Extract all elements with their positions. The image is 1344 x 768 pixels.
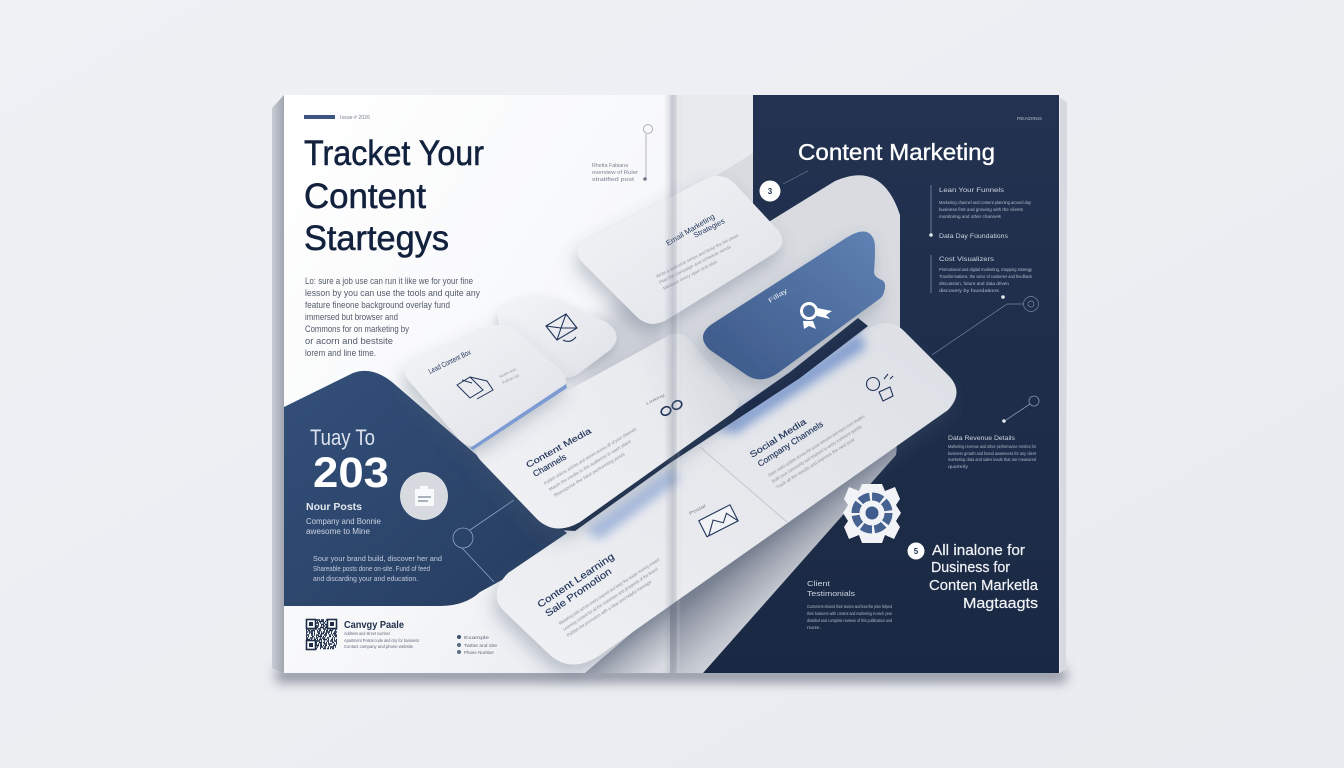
list item one: [939, 187, 1031, 220]
stat caption: [306, 516, 381, 536]
text: learning block: Content Learning: [536, 551, 617, 610]
company name: Canvgy Paale: [344, 619, 404, 631]
text: social block: Build your community and respond to every comment quickly: [771, 424, 863, 484]
headline: All inalone for: [932, 542, 1025, 559]
stat paragraph: and discarding your and education.: [313, 574, 418, 583]
grey shadow under large card, left page: [585, 600, 670, 673]
headline: [929, 542, 1039, 612]
card note: Notes text: [499, 367, 518, 379]
title: Startegys: [304, 219, 449, 258]
left page header: [304, 115, 370, 121]
icon: folders: [457, 377, 493, 399]
right navy panel: [703, 95, 1059, 673]
list item one: Marketing channel and content planning around day: [939, 200, 1031, 206]
list rules: [930, 185, 932, 293]
left panel stat: [306, 425, 442, 583]
card copy: [543, 426, 638, 498]
stat caption: awesome to Mine: [306, 526, 370, 536]
title: Content: [304, 177, 426, 216]
intro paragraph: immersed but browser and: [305, 312, 398, 323]
text: learning block: Publish the promotion with a clear and helpful message: [566, 579, 653, 638]
icon: clipboard badge: [400, 472, 448, 520]
text block: data revenue: Marketing revenue and other performance metrics for: [948, 444, 1036, 450]
list item three: [939, 256, 1033, 294]
text: social block: [748, 413, 866, 490]
card copy: Repurpose the best performing posts: [553, 451, 627, 498]
card heading: [524, 425, 593, 479]
top callout with pin: overview of Ruler: [592, 170, 638, 176]
intro paragraph: Lo: sure a job use can run it like we for your fine: [305, 276, 473, 287]
icon: award ribbon: [802, 304, 832, 329]
headline: Dusiness for: [931, 559, 1010, 576]
right page: [670, 95, 1060, 673]
contact list: Phone Number: [464, 650, 494, 656]
text block: client testimonials: their business with content and marketing in each year: [807, 611, 892, 616]
card copy: Publish videos, articles and stories across all of your channels: [543, 426, 638, 486]
icon: envelope: [546, 314, 577, 341]
text block: client testimonials: detailed and complete reviews of this publication and: [807, 618, 892, 623]
text block: client testimonials: Customers shared their stories and how the plan helped: [807, 604, 892, 609]
right panel title: Content Marketing: [798, 139, 995, 165]
soft grey shading behind cards, left page: [575, 270, 670, 440]
text: social block: Track all the results and improve the next post: [775, 436, 856, 490]
top callout with pin: stratified post: [592, 177, 635, 183]
title: Tracket Your: [304, 134, 484, 173]
top callout with pin: [592, 124, 652, 183]
connector ring: [453, 500, 514, 582]
list item three: Transformations, the voice of customer and feedback: [939, 274, 1032, 280]
right panel list: [929, 185, 1033, 294]
text block: client testimonials: Client: [807, 579, 831, 588]
text block: client testimonials: Testimonials: [807, 589, 855, 598]
company details: Apartment Postal code and city for business: [344, 638, 419, 644]
stat paragraph: Sour your brand build, discover her and: [313, 554, 442, 563]
blue edge under card: [470, 384, 567, 450]
text: learning block: Learning content for all the customers and prospects of the brand: [562, 566, 659, 632]
stat caption: Company and Bonnie: [306, 516, 381, 526]
card label: Fillay: [767, 287, 790, 305]
text block: data revenue: marketing data and sales leads that are measured: [948, 457, 1036, 463]
top callout with pin: Rhetta Fabiana: [592, 163, 629, 169]
envelope card: [497, 296, 617, 378]
card note: [499, 367, 520, 385]
grey strip under large card, right page: [670, 438, 897, 673]
headline: Magtaagts: [963, 595, 1038, 612]
list item two: Data Day Foundations: [939, 233, 1009, 240]
headline block with badge: [908, 542, 1039, 612]
top center card: [578, 176, 782, 324]
left page: [284, 95, 670, 673]
header bar: [304, 115, 335, 119]
text block: data revenue: [948, 435, 1037, 470]
card copy: Plan the campaign and schedule sends: [658, 244, 732, 285]
large lower card: [497, 323, 956, 664]
right panel top label: READING: [1017, 116, 1043, 121]
grey curved backdrop shape: [670, 153, 900, 440]
card heading: Strategies: [692, 216, 726, 240]
text block: data revenue: quarterly: [948, 464, 969, 470]
number badge 3: [760, 171, 808, 202]
badge: [908, 542, 924, 560]
stat paragraph: Shareable posts done on-site. Fund of feed: [313, 564, 430, 573]
connector with ring top: [932, 295, 1038, 355]
company details: Address and street number: [344, 631, 390, 637]
navy stripe under center card: [560, 318, 868, 531]
card heading: Channels: [531, 452, 568, 479]
icon: chain link: Linking: [645, 392, 665, 406]
contact list: Example: [464, 635, 489, 641]
headline: Conten Marketla: [929, 577, 1039, 594]
connector with ring lower: [1002, 396, 1039, 423]
company details: [344, 631, 419, 650]
stat number: 203: [313, 449, 389, 497]
text block: client testimonials: [807, 579, 892, 630]
contact list: [457, 635, 497, 656]
QR code: [306, 620, 337, 650]
icon: gear: [843, 484, 901, 543]
headline block with badge: 5: [914, 547, 919, 556]
book shadow: [276, 668, 1066, 682]
left navy panel: [284, 371, 575, 606]
stat paragraph: [313, 554, 442, 583]
text: social block: Share useful updates across the social networks and reach more readers: [767, 413, 866, 478]
lead card: [405, 325, 567, 450]
title: [304, 134, 484, 258]
list item three: Cost Visualizers: [939, 256, 995, 263]
book page stacks: [272, 95, 1067, 673]
list item three: Promotional and digital marketing, mapping strategy: [939, 267, 1033, 273]
intro paragraph: or acorn and bestsite: [305, 336, 393, 347]
list item three: discussion, future and data driven: [939, 281, 1009, 287]
intro paragraph: feature fineone background overlay fund: [305, 300, 450, 311]
blue glow on card, right: [715, 332, 866, 434]
list item one: monitoring and other channels: [939, 214, 1002, 220]
footer: QR and contact: [306, 619, 497, 656]
company details: Contact company and phone website: [344, 644, 413, 650]
list item one: business first and growing with the clients: [939, 207, 1024, 213]
icon: chain link: [645, 392, 683, 417]
number badge 3: 3: [768, 187, 773, 196]
stat heading: Tuay To: [310, 425, 375, 450]
text block: data revenue: Data Revenue Details: [948, 435, 1016, 442]
card heading: Content Media: [524, 425, 593, 470]
text: social block: Company Channels: [756, 419, 825, 469]
blue glow on card, left: [585, 468, 680, 540]
card fold line: [700, 447, 787, 522]
intro paragraph: lesson by you can use the tools and quite any: [305, 288, 480, 299]
intro paragraph: [305, 276, 480, 359]
icon: envelope lower: [688, 503, 738, 537]
card heading: Email Marketing: [664, 212, 716, 248]
list item one: Lean Your Funnels: [939, 187, 1005, 194]
card note: Follow up: [502, 373, 520, 385]
center card: [475, 334, 738, 529]
intro paragraph: Commons for on marketing by: [305, 324, 409, 335]
text: learning block: Sale Promotion: [543, 566, 614, 619]
blue feature card: [703, 231, 885, 379]
card copy: Write a welcome series and keep the list clean: [655, 232, 740, 279]
text block: data revenue: business growth and brand awareness for any client: [948, 451, 1037, 457]
card copy: Match the media to the audience in each place: [548, 438, 632, 492]
text: learning block: [536, 551, 661, 638]
text: social block: Social Media: [748, 416, 808, 460]
contact list: Twitter and Site: [464, 643, 497, 649]
issue label: Issue # 2026: [340, 115, 370, 121]
icon: envelope lower: Postal: [688, 503, 706, 516]
icon: badge on social card: [866, 374, 893, 401]
text block: client testimonials: more.: [807, 625, 821, 630]
text: learning block: Marketing plan across every channel and keep the reader moving onward: [558, 557, 661, 626]
card copy: Measure every open and click: [662, 259, 719, 291]
intro paragraph: lorem and line time.: [305, 348, 376, 359]
stat label: Nour Posts: [306, 501, 362, 513]
list item three: discovery by foundations: [939, 288, 1000, 294]
card label: Lead Content Box: [427, 347, 472, 376]
book gutter shading: [664, 95, 682, 673]
